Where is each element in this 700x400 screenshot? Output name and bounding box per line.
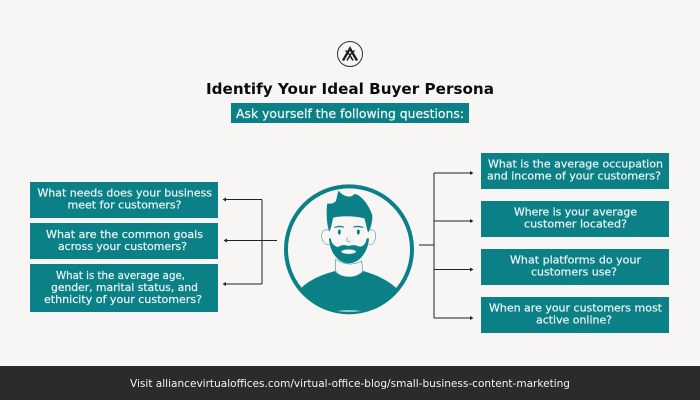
right arrows xyxy=(419,171,474,320)
footer bar xyxy=(0,366,700,400)
question: platforms: customers use? xyxy=(531,267,617,279)
question: active times: When are your customers most xyxy=(489,303,662,315)
mouth xyxy=(341,249,356,254)
question: occupation and income xyxy=(481,153,669,189)
right question boxes xyxy=(481,153,669,333)
portrait ring xyxy=(286,186,412,312)
neck xyxy=(336,259,363,277)
eyes and brows xyxy=(334,226,363,235)
beard xyxy=(329,238,369,263)
hair xyxy=(327,191,372,232)
question: occupation and income: What is the average occupation xyxy=(488,159,663,171)
question: demographics xyxy=(30,264,218,312)
icon: company logo xyxy=(338,42,362,66)
question: common goals xyxy=(30,223,218,259)
question: active times: active online? xyxy=(536,315,612,327)
question: demographics: gender, marital status, and xyxy=(51,282,198,294)
question: location xyxy=(481,201,669,237)
left question boxes xyxy=(30,182,218,312)
question: demographics: What is the average age, xyxy=(56,270,185,282)
question: occupation and income: and income of your customers? xyxy=(487,171,661,183)
nose xyxy=(347,237,351,242)
question: location: Where is your average xyxy=(514,207,637,219)
subtitle banner: Ask yourself the following questions: xyxy=(236,107,464,121)
question: demographics: ethnicity of your customers? xyxy=(44,294,202,306)
title: Identify Your Ideal Buyer Persona xyxy=(206,80,494,98)
question: platforms: What platforms do your xyxy=(510,255,642,267)
question: common goals: across your customers? xyxy=(58,241,187,253)
subtitle banner xyxy=(231,103,469,123)
question: active times xyxy=(481,297,669,333)
question: business needs: meet for customers? xyxy=(68,200,182,212)
question: business needs: What needs does your business xyxy=(38,188,212,200)
question: common goals: What are the common goals xyxy=(46,229,203,241)
question: platforms xyxy=(481,249,669,285)
footer bar: Visit alliancevirtualoffices.com/virtual-office-blog/small-business-content-marketing xyxy=(130,378,570,390)
left arrows xyxy=(222,198,277,286)
question: location: customer located? xyxy=(524,219,627,231)
persona portrait xyxy=(286,186,412,314)
question: business needs xyxy=(30,182,218,218)
shirt xyxy=(301,271,397,314)
ears xyxy=(322,230,376,245)
